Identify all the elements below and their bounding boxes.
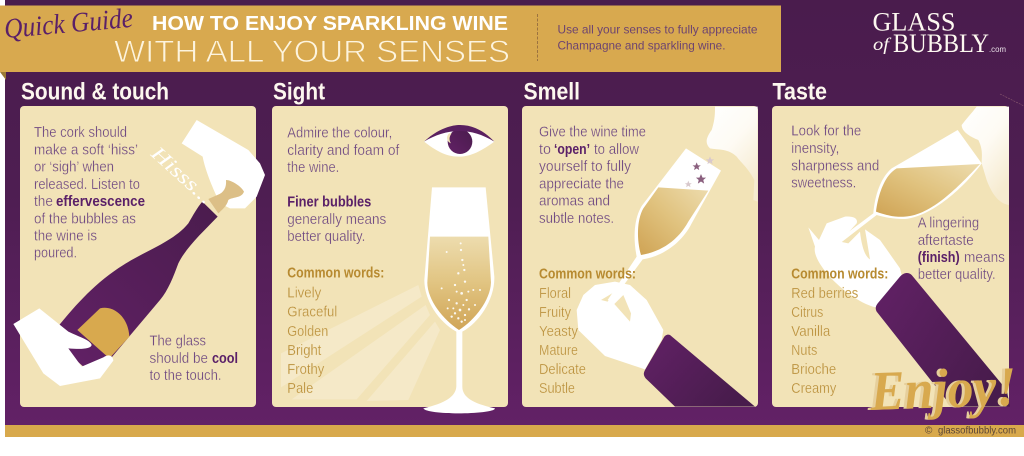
footer bar: © xyxy=(925,426,933,436)
text: cork: The cork should xyxy=(34,124,127,141)
heading: smell: Smell xyxy=(524,78,580,106)
sleeve xyxy=(876,273,1010,407)
text: intensity: sweetness. xyxy=(791,175,856,192)
intro text: Champagne and sparkling wine. xyxy=(558,38,726,52)
cork xyxy=(208,180,244,213)
wine xyxy=(427,237,491,330)
text: intensity: Look for the xyxy=(791,123,861,140)
common words: sight: Pale xyxy=(287,380,313,397)
hand: lower xyxy=(13,308,113,386)
bottle xyxy=(57,202,218,367)
wine xyxy=(876,164,980,217)
text: cork: effervescence xyxy=(56,193,145,210)
sleeve xyxy=(644,335,755,407)
text: colour and bubbles xyxy=(287,125,400,245)
common words: sight: Bright xyxy=(287,342,322,359)
common words: sight: Lively xyxy=(287,285,322,302)
panel: taste xyxy=(772,78,1024,423)
hand: upper xyxy=(182,120,265,208)
text: intensity xyxy=(791,123,879,192)
text: cork: poured. xyxy=(34,245,77,262)
text: finish: (finish) xyxy=(918,249,960,266)
text: cork: or ‘sigh’ when xyxy=(34,159,114,176)
logo: of xyxy=(873,34,892,54)
text: colour and bubbles: generally means xyxy=(287,211,386,228)
hand xyxy=(577,282,663,369)
common words: sight: Frothy xyxy=(287,361,325,378)
footer bar xyxy=(5,425,1024,437)
common words: taste xyxy=(791,266,888,397)
bubbles xyxy=(441,242,481,323)
text: open: aromas and xyxy=(539,192,610,210)
common words: taste: Brioche xyxy=(791,361,836,378)
text: cork: of the bubbles as xyxy=(34,210,136,227)
text: cork: the wine is xyxy=(34,228,97,244)
text: open: Give the wine time xyxy=(539,124,646,141)
heading: sound and touch: Sound & touch xyxy=(21,78,169,106)
logo: BUBBLY xyxy=(893,29,989,58)
illustration: nose, glass, hand xyxy=(577,107,758,407)
text: cool glass: should be xyxy=(150,350,208,367)
text: finish: better quality. xyxy=(918,266,996,283)
text: open: to xyxy=(539,141,551,158)
text: colour and bubbles: Admire the colour, xyxy=(287,125,392,142)
intro text: Use all your senses to fully appreciate xyxy=(558,22,758,36)
common words: smell: Delicate xyxy=(539,361,586,378)
aroma flowers xyxy=(685,156,714,187)
common words: smell: Subtle xyxy=(539,380,575,397)
common words: smell: Fruity xyxy=(539,304,571,321)
common words: sight: Graceful xyxy=(287,304,337,321)
panel: smell xyxy=(522,78,758,407)
text: colour and bubbles: clarity and foam of xyxy=(287,142,400,159)
panel: sight xyxy=(272,78,508,413)
text: colour and bubbles: better quality. xyxy=(287,228,365,245)
heading: taste: Taste xyxy=(772,78,827,106)
common words: sight: Golden xyxy=(287,323,328,340)
common words: taste: Vanilla xyxy=(791,323,831,340)
hand xyxy=(808,217,902,307)
common words: smell: Common words: xyxy=(539,266,636,282)
title xyxy=(114,12,510,69)
intro text xyxy=(558,22,758,52)
text: cool glass xyxy=(150,333,238,384)
text: finish: A lingering xyxy=(918,214,979,231)
illustration: mouth, glass, hand xyxy=(808,107,1010,407)
title: WITH ALL YOUR SENSES xyxy=(114,33,510,69)
text: finish: means xyxy=(964,249,1005,266)
illustration: bottle and hands xyxy=(13,120,265,386)
logo: .com xyxy=(989,45,1006,54)
text: open xyxy=(539,124,646,227)
common words: taste: Nuts xyxy=(791,342,817,359)
logo xyxy=(872,8,1006,58)
common words: smell: Floral xyxy=(539,285,571,302)
title: HOW TO ENJOY SPARKLING WINE xyxy=(152,12,508,35)
wine xyxy=(638,187,708,255)
light rays xyxy=(281,285,440,401)
common words: taste: Creamy xyxy=(791,380,837,397)
quick guide script: Quick Guide xyxy=(3,3,134,45)
text: cork: the xyxy=(34,193,53,210)
text: colour and bubbles: Finer bubbles xyxy=(287,194,371,210)
common words: sight: Common words: xyxy=(287,266,384,282)
logo: GLASS xyxy=(872,8,956,36)
common words: sight xyxy=(287,266,384,397)
face profile xyxy=(962,107,1009,205)
common words: smell: Mature xyxy=(539,342,578,359)
text: colour and bubbles: the wine. xyxy=(287,159,339,176)
illustration: champagne flute xyxy=(423,187,495,413)
glass xyxy=(838,130,982,243)
face profile xyxy=(707,107,758,202)
header banner xyxy=(0,3,781,80)
text: cool glass: The glass xyxy=(150,333,206,350)
common words: taste: Common words: xyxy=(791,266,888,282)
common words: taste: Red berries xyxy=(791,285,858,302)
heading: sight: Sight xyxy=(273,78,325,106)
text: cork xyxy=(34,124,145,262)
panel: sound and touch xyxy=(13,78,265,407)
text: open: subtle notes. xyxy=(539,210,614,227)
text: open: ‘open’ xyxy=(554,141,590,158)
text: finish xyxy=(918,214,1005,283)
hiss label: Hisss... xyxy=(146,142,217,209)
text: open: appreciate the xyxy=(539,176,624,192)
common words: smell: Yeasty xyxy=(539,323,578,340)
text: finish: aftertaste xyxy=(918,232,974,249)
text: cool glass: cool xyxy=(212,350,238,367)
bottle label xyxy=(77,308,129,358)
text: cork: make a soft ‘hiss’ xyxy=(34,141,138,158)
text: open: to allow xyxy=(594,141,639,158)
icon: eye xyxy=(424,125,494,157)
text: intensity: sharpness and xyxy=(791,158,879,174)
glass xyxy=(608,148,721,302)
text: intensity: inensity, xyxy=(791,140,839,157)
text: open: yourself to fully xyxy=(539,158,631,175)
common words: smell xyxy=(539,266,636,397)
text: cork: released. Listen to xyxy=(34,176,140,193)
common words: taste: Citrus xyxy=(791,304,823,321)
text: cool glass: to the touch. xyxy=(150,367,222,384)
enjoy script: Enjoy! xyxy=(865,356,1014,423)
footer bar: glassofbubbly.com xyxy=(938,426,1016,436)
